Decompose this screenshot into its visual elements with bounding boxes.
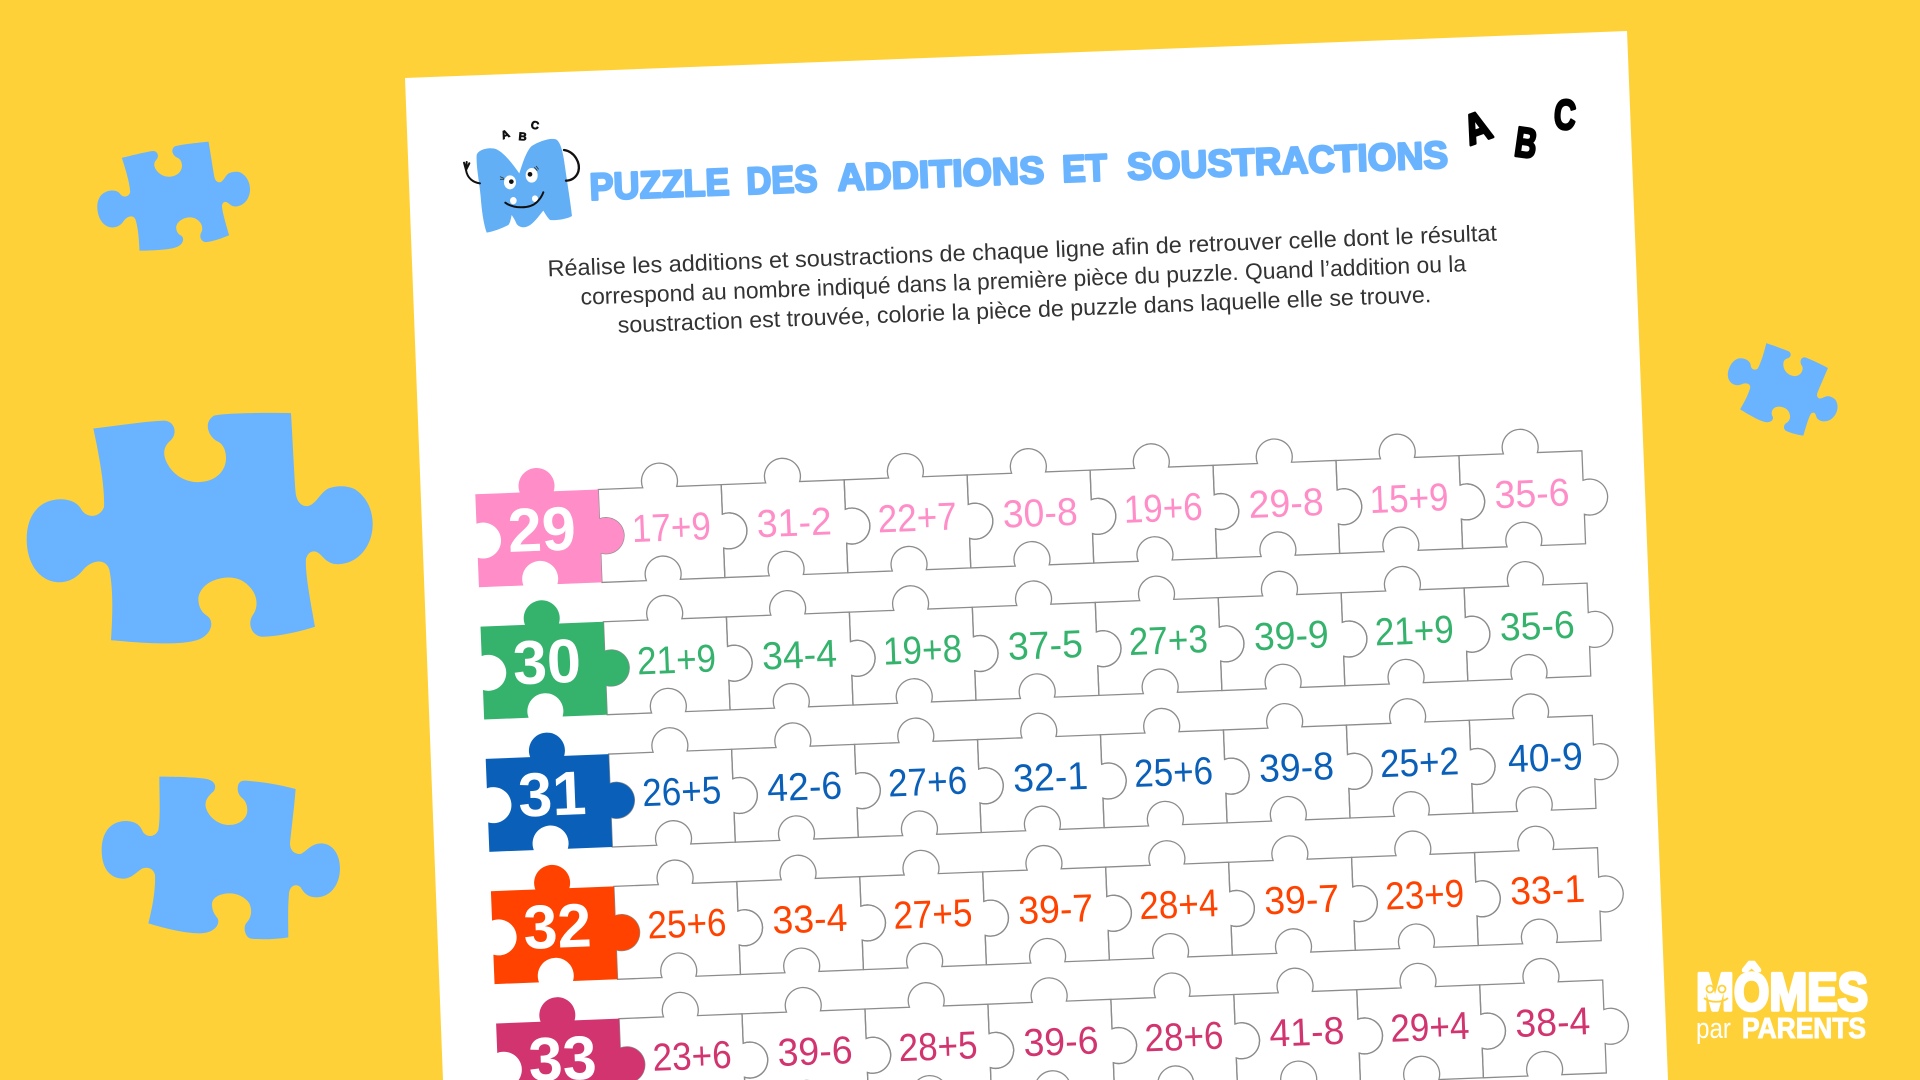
sums row 29: 30-8 bbox=[1002, 491, 1079, 537]
sums row 32: 28+4 bbox=[1138, 882, 1219, 928]
sums row 31 bbox=[641, 735, 1584, 815]
mascot left arm bbox=[464, 162, 480, 183]
sums row 31: 39-8 bbox=[1258, 745, 1335, 791]
coloured piece 30 bbox=[480, 597, 631, 720]
sums row 31: 25+6 bbox=[1133, 750, 1214, 796]
sums row 33: 39-6 bbox=[777, 1029, 853, 1075]
sums row 32: 25+6 bbox=[647, 901, 727, 948]
mascot letters ABC bbox=[499, 119, 540, 144]
logo word Parents: PARENTS bbox=[1742, 1013, 1866, 1045]
puzzle row 31 bbox=[485, 691, 1620, 852]
big letters ABC bbox=[1457, 90, 1578, 168]
title bbox=[589, 135, 1449, 209]
sums row 30: 21+9 bbox=[636, 637, 717, 683]
sums row 30: 21+9 bbox=[1374, 608, 1455, 654]
logo: Mômes par Parents bbox=[1696, 961, 1868, 1045]
number 31: 31 bbox=[517, 759, 587, 831]
title: DES bbox=[746, 158, 818, 203]
sums row 33: 28+5 bbox=[898, 1024, 978, 1070]
sums row 30: 19+8 bbox=[882, 628, 963, 674]
outlined pieces row 32 bbox=[613, 823, 1625, 979]
coloured piece 29 bbox=[474, 465, 626, 587]
sums row 29: 31-2 bbox=[756, 500, 833, 546]
mascot letters ABC: A bbox=[499, 128, 512, 142]
puzzle row 29 bbox=[474, 426, 1609, 587]
outlined pieces row 33 bbox=[618, 955, 1630, 1080]
mascot eyes bbox=[500, 166, 539, 189]
sums row 33: 29+4 bbox=[1390, 1005, 1470, 1051]
puzzle row 33 bbox=[495, 955, 1630, 1080]
sums row 30: 34-4 bbox=[761, 633, 838, 679]
title: SOUSTRACTIONS bbox=[1126, 135, 1449, 189]
logo face bbox=[1704, 986, 1728, 1002]
mascot teeth bbox=[510, 195, 538, 204]
sums row 33: 39-6 bbox=[1023, 1019, 1099, 1065]
number 32: 32 bbox=[522, 891, 593, 963]
instructions: soustraction est trouvée, colorie la pièce de puzzle dans laquelle elle se trouve. bbox=[617, 281, 1432, 338]
big letters ABC: A bbox=[1457, 102, 1498, 155]
sums row 31: 32-1 bbox=[1012, 755, 1089, 801]
number 30: 30 bbox=[512, 627, 582, 698]
sums row 29: 15+9 bbox=[1369, 476, 1449, 522]
sums row 29: 22+7 bbox=[877, 495, 958, 542]
sums row 31: 27+6 bbox=[887, 760, 968, 806]
puzzle piece: large left bbox=[27, 413, 373, 643]
sums row 29: 17+9 bbox=[631, 505, 712, 551]
outlined pieces row 29 bbox=[597, 426, 1609, 582]
sums row 33: 38-4 bbox=[1514, 1000, 1591, 1046]
instructions bbox=[547, 220, 1500, 340]
sums row 32: 39-7 bbox=[1263, 877, 1340, 923]
sums row 29 bbox=[631, 471, 1570, 551]
big letters ABC: C bbox=[1552, 90, 1578, 139]
sums row 31: 40-9 bbox=[1507, 735, 1584, 781]
sums row 33: 28+6 bbox=[1144, 1014, 1224, 1061]
title: ET bbox=[1061, 147, 1108, 191]
mascot: blue letter M bbox=[464, 119, 579, 233]
coloured piece 32 bbox=[490, 862, 641, 984]
sums row 30: 37-5 bbox=[1007, 623, 1084, 669]
sums row 32: 39-7 bbox=[1017, 887, 1094, 933]
sums row 29: 35-6 bbox=[1494, 471, 1570, 517]
sums row 31: 25+2 bbox=[1379, 740, 1460, 786]
sums row 32: 33-1 bbox=[1509, 868, 1586, 914]
puzzle piece: small top-left bbox=[92, 138, 255, 256]
number 29: 29 bbox=[506, 494, 577, 566]
worksheet paper bbox=[405, 31, 1668, 1080]
puzzle piece: right bbox=[1714, 329, 1853, 449]
sums row 30: 39-9 bbox=[1253, 613, 1330, 659]
mascot body bbox=[477, 139, 572, 233]
sums row 32: 33-4 bbox=[772, 897, 848, 943]
mascot letters ABC: B bbox=[518, 131, 527, 144]
sums row 32: 23+9 bbox=[1384, 873, 1465, 919]
sums row 33 bbox=[652, 1000, 1591, 1080]
logo word par: par bbox=[1696, 1013, 1731, 1045]
big letters ABC: B bbox=[1512, 118, 1540, 168]
title: PUZZLE bbox=[589, 162, 730, 209]
coloured piece 33 bbox=[495, 994, 647, 1080]
instructions: correspond au nombre indiqué dans la première pièce du puzzle. Quand l’addition ou la bbox=[580, 250, 1467, 310]
mascot right arm bbox=[564, 150, 579, 181]
sums row 33: 41-8 bbox=[1269, 1010, 1345, 1056]
sums row 32 bbox=[647, 868, 1586, 948]
sums row 33: 23+6 bbox=[652, 1034, 732, 1080]
instructions: Réalise les additions et soustractions de chaque ligne afin de retrouver celle dont le résultat bbox=[547, 220, 1498, 281]
sums row 30: 35-6 bbox=[1499, 604, 1576, 650]
sums row 30: 27+3 bbox=[1128, 618, 1209, 664]
puzzle row 32 bbox=[490, 823, 1625, 984]
outlined pieces row 31 bbox=[608, 691, 1620, 847]
outlined pieces row 30 bbox=[603, 558, 1615, 715]
sums row 32: 27+5 bbox=[893, 892, 973, 938]
sums row 29: 19+6 bbox=[1123, 486, 1204, 532]
logo word Mômes: MÔMES bbox=[1696, 961, 1868, 1022]
mascot letters ABC: C bbox=[530, 119, 540, 133]
sums row 31: 26+5 bbox=[641, 769, 722, 815]
puzzle row 30 bbox=[480, 558, 1615, 720]
puzzle piece: bottom left bbox=[102, 777, 340, 939]
sums row 31: 42-6 bbox=[766, 764, 843, 810]
coloured piece 31 bbox=[485, 729, 636, 852]
title: ADDITIONS bbox=[837, 150, 1045, 200]
mascot smile bbox=[505, 192, 543, 207]
sums row 29: 29-8 bbox=[1248, 481, 1324, 527]
sums row 30 bbox=[636, 604, 1576, 683]
